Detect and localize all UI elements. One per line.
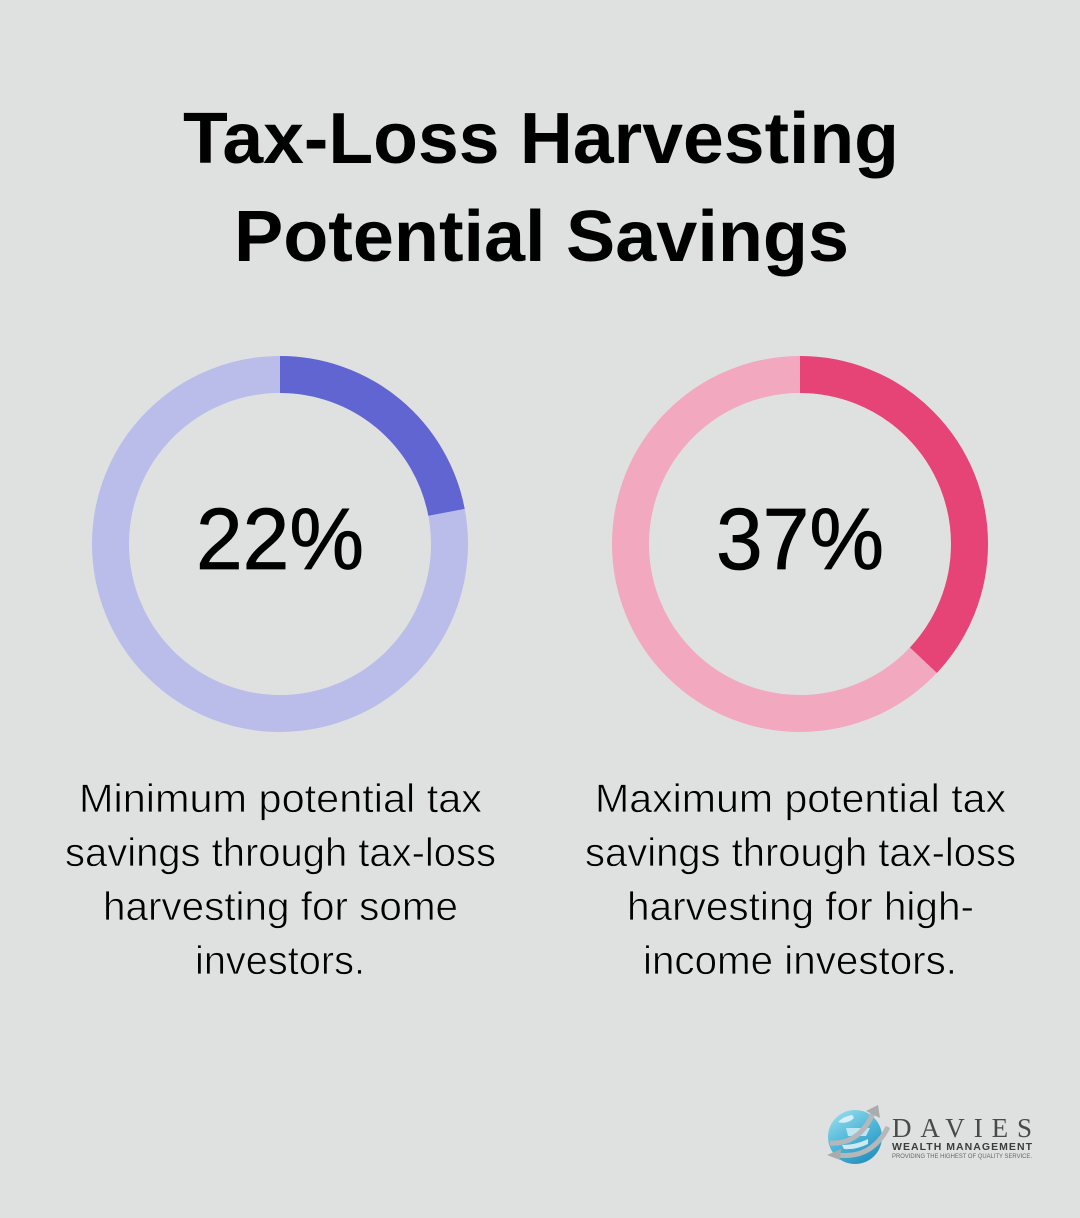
title (183, 99, 899, 277)
description: minimum savings (65, 777, 496, 983)
description: maximum savings: savings through tax-loss (585, 831, 1016, 875)
title: Tax-Loss Harvesting (183, 99, 899, 179)
description: minimum savings: Minimum potential tax (79, 777, 482, 821)
logo: Davies Wealth Management (827, 1105, 1033, 1164)
value: 37%: 37% (716, 491, 884, 588)
description: maximum savings (585, 777, 1016, 983)
description: maximum savings: Maximum potential tax (595, 777, 1006, 821)
description: minimum savings: harvesting for some (103, 885, 458, 929)
value: 22%: 22% (196, 491, 364, 588)
panel: minimum savings (65, 374, 496, 983)
subtitle: WEALTH MANAGEMENT (892, 1141, 1033, 1153)
description: maximum savings: harvesting for high- (627, 885, 974, 929)
description: minimum savings: savings through tax-loss (65, 831, 496, 875)
tagline: PROVIDING THE HIGHEST OF QUALITY SERVICE. (892, 1153, 1032, 1160)
donut chart: 22% (110, 374, 450, 714)
panel: maximum savings (585, 374, 1016, 983)
wordmark: DAVIES (892, 1113, 1032, 1143)
description: minimum savings: investors. (195, 939, 365, 983)
description: maximum savings: income investors. (643, 939, 957, 983)
icon: globe with arrows (827, 1105, 888, 1164)
title: Potential Savings (234, 197, 849, 277)
donut chart: 37% (630, 374, 970, 714)
